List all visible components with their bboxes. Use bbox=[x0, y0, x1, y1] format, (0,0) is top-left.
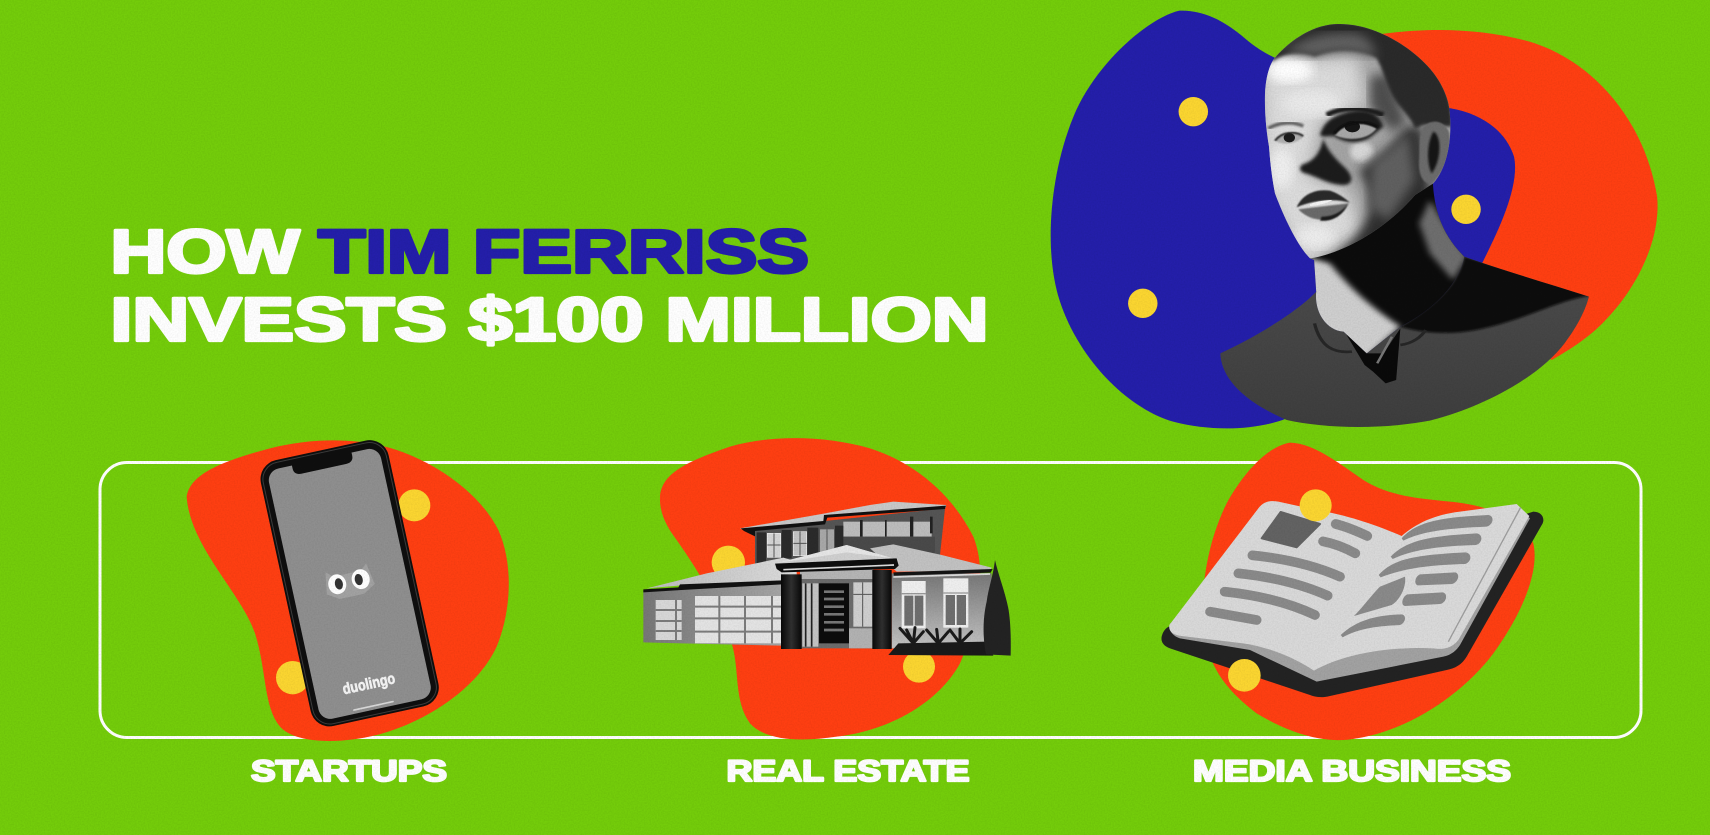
right wing roof bbox=[870, 544, 992, 572]
upper storey bbox=[755, 508, 945, 565]
mouth bbox=[1297, 190, 1350, 207]
right wing wall bbox=[892, 573, 992, 648]
entry portico bbox=[800, 570, 873, 648]
head bbox=[1264, 24, 1450, 258]
text bars right page bbox=[1341, 515, 1493, 637]
blue blob behind portrait bbox=[1051, 11, 1515, 428]
upper roof bbox=[740, 502, 946, 530]
yellow dot bbox=[1228, 659, 1261, 692]
left eye bbox=[1275, 133, 1303, 144]
ear bbox=[1419, 122, 1450, 184]
picture block bbox=[1262, 512, 1320, 547]
red blob bbox=[660, 438, 980, 740]
yellow dot bbox=[712, 546, 745, 579]
red blob bbox=[187, 440, 509, 741]
book bbox=[1161, 501, 1543, 697]
tree bbox=[984, 560, 1011, 656]
yellow dot bbox=[903, 651, 935, 683]
right page bbox=[1314, 504, 1529, 671]
right cheek shade bbox=[1321, 121, 1435, 256]
shirt bbox=[1215, 253, 1594, 433]
duolingo wordmark: duolingo bbox=[341, 670, 397, 698]
title: HOW bbox=[110, 218, 300, 286]
yellow dot bbox=[1128, 289, 1158, 318]
hair bbox=[1370, 73, 1407, 132]
title bbox=[110, 218, 988, 354]
garage roof bbox=[647, 558, 797, 588]
title: INVESTS $100 MILLION bbox=[110, 286, 988, 354]
garage wing bbox=[643, 582, 782, 646]
text bars left page bbox=[1210, 524, 1367, 620]
panel: media business bbox=[1161, 443, 1543, 740]
house bbox=[643, 502, 1011, 656]
yellow dot bbox=[1451, 195, 1481, 224]
rounded outline frame bbox=[100, 462, 1641, 738]
phone bbox=[257, 436, 442, 730]
neck bbox=[1310, 184, 1464, 354]
page edges bbox=[1169, 507, 1530, 682]
red blob bbox=[1203, 443, 1535, 740]
nose bbox=[1300, 138, 1351, 185]
owl logo bbox=[322, 562, 376, 602]
yellow dot bbox=[398, 489, 430, 521]
left page bbox=[1169, 501, 1402, 671]
yellow dot bbox=[1300, 489, 1332, 521]
red blob behind portrait bbox=[1367, 30, 1658, 360]
yellow dot bbox=[276, 661, 309, 694]
yellow dot bbox=[1179, 97, 1208, 126]
label: media business: MEDIA BUSINESS bbox=[1193, 755, 1511, 788]
shrubs bbox=[888, 628, 993, 656]
label: real estate: REAL ESTATE bbox=[726, 755, 970, 788]
label: startups: STARTUPS bbox=[251, 755, 447, 788]
panel: real estate bbox=[643, 438, 1011, 740]
cover bbox=[1161, 512, 1543, 697]
portrait illustration bbox=[1051, 11, 1658, 433]
title: TIM FERRISS bbox=[318, 218, 809, 286]
right eye socket bbox=[1320, 110, 1383, 142]
panel: startups bbox=[187, 436, 509, 741]
lit face bbox=[1262, 57, 1365, 267]
